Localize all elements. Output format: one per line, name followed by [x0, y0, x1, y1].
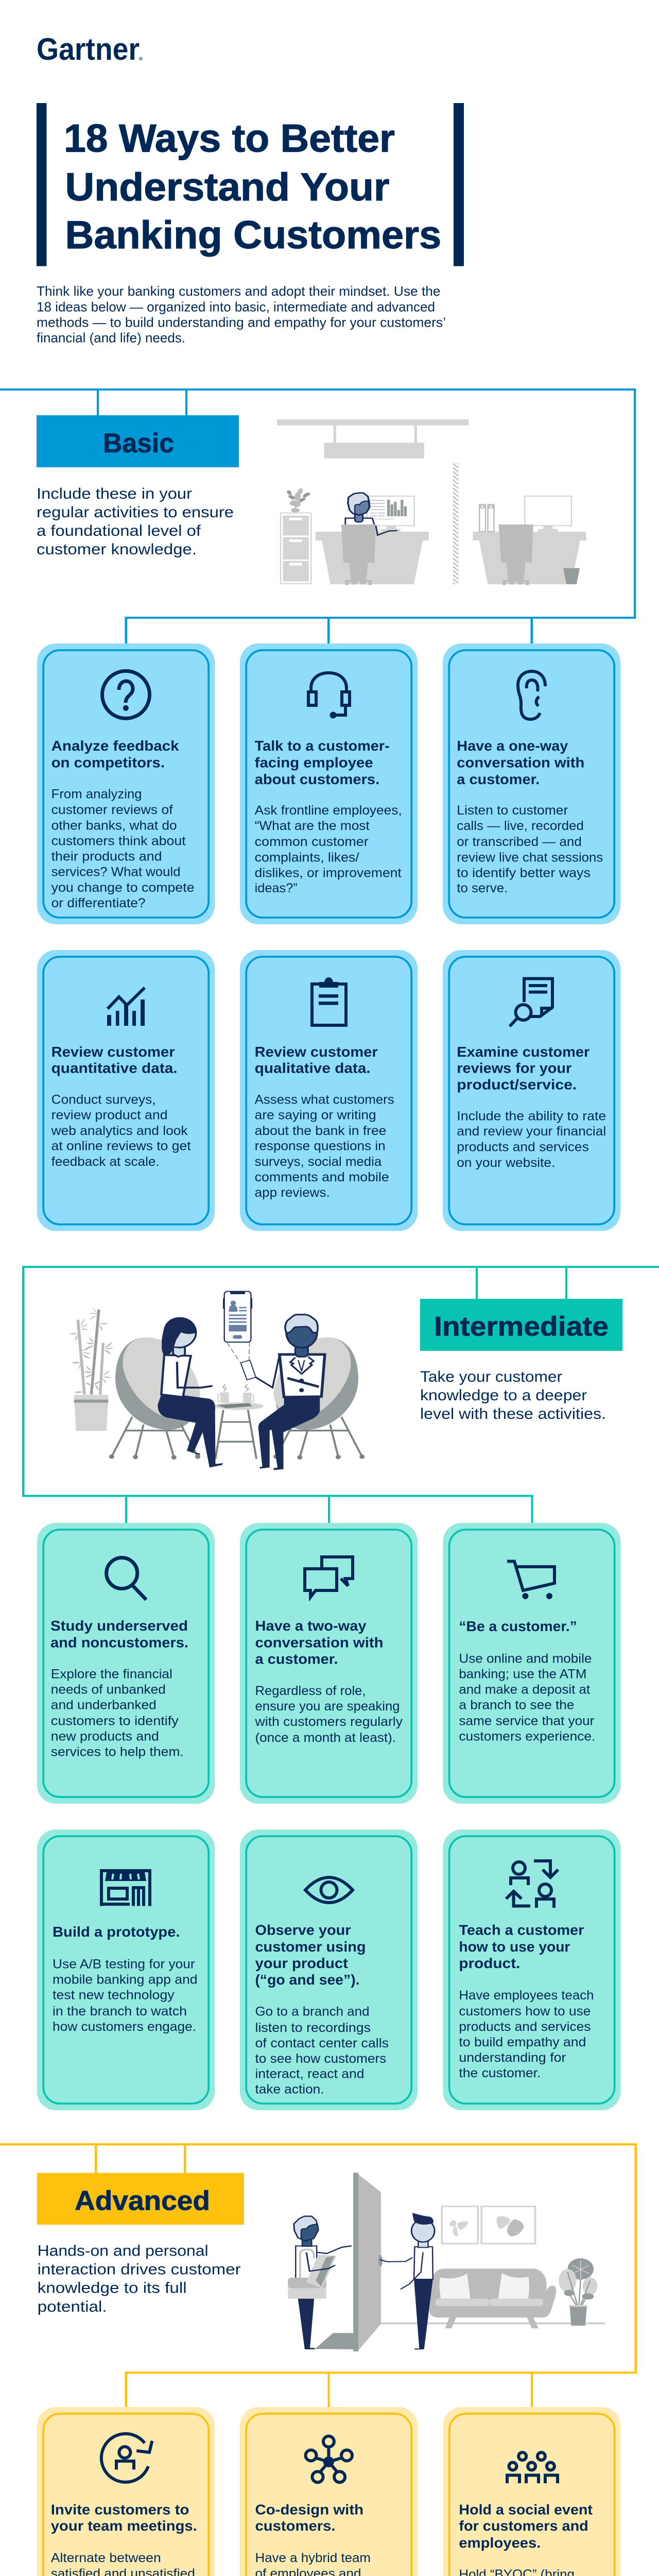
- panel: card quantitative data: [37, 950, 215, 1231]
- heading: on competitors.: [51, 754, 165, 771]
- text: Intermediate description: level with these activities.: [420, 1405, 606, 1422]
- text: Basic description: regular activities to ensure: [37, 504, 234, 521]
- body text: or transcribed — and: [457, 835, 582, 849]
- icon: clipboard: [312, 977, 346, 1025]
- intro paragraph: methods — to build understanding and empathy for your customers’: [37, 314, 446, 330]
- body text: surveys, social media: [255, 1155, 381, 1169]
- body text: Conduct surveys,: [51, 1093, 156, 1107]
- body text: services to help them.: [51, 1745, 184, 1759]
- heading: [255, 2502, 363, 2534]
- body text: at online reviews to get: [51, 1139, 191, 1154]
- heading: [255, 1618, 383, 1667]
- heading: customers.: [255, 2518, 336, 2534]
- logo: Gartner top: ®: [139, 56, 143, 61]
- heading: Review customer: [255, 1044, 378, 1060]
- body text: about the bank in free: [255, 1124, 386, 1138]
- heading: [457, 1044, 590, 1093]
- body text: ensure you are speaking: [255, 1699, 400, 1714]
- body text: mobile banking app and: [53, 1973, 198, 1987]
- body text: to build empathy and: [459, 2035, 586, 2049]
- body text: services? What would: [51, 865, 181, 879]
- icon: storefront: [101, 1871, 150, 1906]
- heading: and noncustomers.: [50, 1635, 188, 1651]
- heading: for customers and: [459, 2518, 588, 2534]
- heading: product.: [459, 1955, 520, 1971]
- body text: and underbanked: [51, 1698, 157, 1713]
- panel: card social event: [443, 2407, 620, 2576]
- icon: network: [306, 2436, 352, 2482]
- body text: test new technology: [53, 1988, 175, 2003]
- body text: products and services: [457, 1140, 589, 1154]
- heading: a customer.: [457, 771, 540, 787]
- heading: your product: [255, 1955, 348, 1971]
- body text: web analytics and look: [51, 1124, 188, 1138]
- heading: conversation with: [255, 1635, 383, 1651]
- heading: [255, 1922, 366, 1988]
- body text: [459, 1652, 595, 1744]
- body text: the customer.: [459, 2066, 541, 2080]
- intro paragraph: Think like your banking customers and adopt their mindset. Use the: [37, 283, 441, 299]
- text: Intermediate description: [420, 1368, 606, 1422]
- panel: card one-way conversation: [443, 643, 620, 924]
- body text: customers experience.: [459, 1730, 595, 1744]
- intro paragraph: [37, 283, 446, 345]
- text: Basic description: Include these in your: [37, 485, 192, 502]
- body text: [255, 1093, 394, 1200]
- panel: card examine reviews: [443, 950, 620, 1231]
- heading: Advanced label: Advanced: [75, 2185, 210, 2216]
- body text: [254, 1684, 403, 1745]
- heading: reviews for your: [457, 1060, 572, 1076]
- panel: card study underserved: [37, 1523, 215, 1804]
- heading: [50, 1618, 188, 1651]
- body text: new products and: [51, 1730, 159, 1744]
- body text: [255, 2004, 389, 2097]
- body text: [50, 2551, 195, 2576]
- body text: to serve.: [457, 881, 508, 895]
- illustration: door and living room: [288, 2173, 605, 2351]
- panel: card talk to employee: [240, 643, 418, 924]
- icon: cycle with person: [101, 2434, 152, 2482]
- body text: (once a month at least).: [255, 1731, 396, 1745]
- heading: [457, 738, 584, 787]
- heading: [51, 2502, 197, 2534]
- title block: Banking Customers: [65, 213, 441, 257]
- body text: how customers engage.: [53, 2020, 196, 2034]
- heading: how to use your: [459, 1939, 570, 1955]
- heading: employees.: [459, 2535, 541, 2551]
- body text: Include the ability to rate: [457, 1109, 606, 1123]
- body text: Have a hybrid team: [255, 2551, 371, 2565]
- icon: document with magnifier: [510, 979, 552, 1026]
- body text: needs of unbanked: [51, 1683, 166, 1697]
- body text: review live chat sessions: [457, 851, 603, 865]
- heading: [51, 738, 179, 771]
- heading: [255, 1044, 378, 1076]
- body text: a branch to see the: [459, 1698, 574, 1713]
- panel: card analyze feedback: [37, 643, 215, 924]
- icon: chat bubbles: [305, 1557, 353, 1597]
- heading: quantitative data.: [51, 1060, 178, 1076]
- body text: customers think about: [51, 834, 186, 849]
- text: Advanced description: interaction drives customer: [38, 2261, 241, 2278]
- heading: [459, 1922, 584, 1971]
- body text: app reviews.: [255, 1185, 330, 1200]
- body text: Explore the financial: [51, 1667, 172, 1682]
- body text: or differentiate?: [51, 896, 146, 910]
- body text: interact, react and: [255, 2067, 365, 2081]
- text: Intermediate description: knowledge to a deeper: [420, 1387, 587, 1404]
- heading: Intermediate label: [420, 1299, 622, 1351]
- panel: card build a prototype: [37, 1829, 215, 2110]
- body text: Assess what customers: [255, 1093, 394, 1107]
- heading: “Be a customer.”: [459, 1618, 577, 1634]
- panel: card two-way conversation: [240, 1523, 418, 1804]
- body text: and review your financial: [457, 1124, 606, 1139]
- body text: to identify better ways: [457, 866, 591, 880]
- body text: with customers regularly: [254, 1715, 403, 1729]
- body text: [51, 1667, 184, 1759]
- heading: about customers.: [255, 771, 379, 787]
- heading: your team meetings.: [51, 2518, 197, 2534]
- panel: card qualitative data: [240, 950, 418, 1231]
- body text: listen to recordings: [255, 2021, 371, 2035]
- body text: comments and mobile: [255, 1170, 389, 1184]
- heading: [459, 2502, 593, 2551]
- text: Advanced description: knowledge to its full: [38, 2280, 187, 2297]
- heading: Examine customer: [457, 1044, 590, 1060]
- heading: product/service.: [457, 1077, 577, 1093]
- heading: [255, 738, 390, 787]
- heading: Build a prototype.: [53, 1924, 180, 1940]
- heading: Review customer: [51, 1044, 175, 1060]
- icon: group of people: [507, 2452, 558, 2483]
- illustration: office desks: [277, 419, 586, 585]
- body text: you change to compete: [51, 880, 195, 895]
- heading: Talk to a customer-: [255, 738, 390, 754]
- body text: Ask frontline employees,: [255, 803, 402, 818]
- body text: [51, 1093, 191, 1169]
- icon: shopping cart: [507, 1561, 554, 1599]
- heading: Analyze feedback: [51, 738, 179, 754]
- text: Intermediate description: Take your customer: [420, 1368, 562, 1385]
- body text: customers to identify: [51, 1714, 179, 1728]
- body text: review product and: [51, 1108, 168, 1123]
- intro paragraph: 18 ideas below — organized into basic, intermediate and advanced: [37, 299, 435, 315]
- body text: [255, 803, 402, 895]
- heading: (“go and see”).: [255, 1972, 359, 1988]
- body text: are saying or writing: [255, 1108, 376, 1123]
- body text: take action.: [255, 2082, 324, 2097]
- body text: and make a deposit at: [459, 1683, 590, 1697]
- icon: chart: [107, 988, 145, 1026]
- body text: Go to a branch and: [255, 2004, 370, 2019]
- body text: response questions in: [255, 1139, 386, 1154]
- body text: in the branch to watch: [53, 2004, 187, 2019]
- body text: their products and: [51, 850, 162, 864]
- body text: Listen to customer: [457, 803, 568, 818]
- heading: customer using: [255, 1939, 366, 1955]
- panel: intermediate section frame: [22, 1266, 659, 1524]
- body text: products and services: [459, 2020, 591, 2034]
- illustration: two people sitting with phone: [70, 1292, 365, 1470]
- intro paragraph: financial (and life) needs.: [37, 330, 185, 345]
- body text: Use online and mobile: [459, 1652, 592, 1666]
- heading: qualitative data.: [255, 1060, 371, 1076]
- panel: card teach a customer: [443, 1829, 620, 2110]
- body text: banking; use the ATM: [459, 1667, 586, 1682]
- body text: on your website.: [457, 1156, 555, 1170]
- heading: Hold a social event: [459, 2502, 593, 2518]
- body text: to see how customers: [255, 2052, 386, 2066]
- body text: [457, 803, 603, 895]
- body text: dislikes, or improvement: [255, 866, 402, 880]
- body text: complaints, likes/: [255, 851, 359, 865]
- heading: Invite customers to: [51, 2502, 189, 2518]
- body text: Use A/B testing for your: [53, 1957, 195, 1972]
- text: Basic description: customer knowledge.: [37, 541, 197, 558]
- title block: 18 Ways to Better: [64, 117, 395, 161]
- body text: other banks, what do: [51, 819, 177, 833]
- panel: card co-design: [240, 2407, 418, 2576]
- body text: customers how to use: [459, 2004, 591, 2019]
- body text: of contact center calls: [255, 2036, 389, 2050]
- heading: facing employee: [255, 754, 373, 771]
- icon: ear: [518, 671, 545, 719]
- body text: [53, 1957, 198, 2034]
- text: Advanced description: [38, 2242, 241, 2315]
- icon: people exchange: [506, 1861, 558, 1908]
- body text: feedback at scale.: [51, 1155, 160, 1169]
- body text: Regardless of role,: [255, 1684, 366, 1698]
- heading: Intermediate label: Intermediate: [434, 1312, 609, 1342]
- icon: magnifying glass: [107, 1558, 146, 1600]
- body text: [51, 787, 195, 910]
- heading: Observe your: [255, 1922, 351, 1938]
- text: Advanced description: potential.: [38, 2298, 107, 2315]
- body text: common customer: [255, 835, 369, 849]
- text: Basic description: a foundational level of: [37, 522, 201, 539]
- heading: [51, 1044, 178, 1076]
- heading: Co-design with: [255, 2502, 363, 2518]
- title block: [37, 103, 464, 266]
- body text: same service that your: [459, 1714, 594, 1728]
- heading: Advanced label: [37, 2173, 244, 2225]
- panel: basic section frame: [0, 388, 636, 644]
- body text: Alternate between: [51, 2551, 161, 2565]
- body text: [459, 1988, 594, 2080]
- title block: Understand Your: [65, 165, 389, 209]
- body text: [457, 1109, 606, 1170]
- heading: Basic label: [37, 415, 239, 467]
- heading: Teach a customer: [459, 1922, 584, 1938]
- heading: Have a two-way: [255, 1618, 367, 1634]
- panel: card invite customers: [37, 2407, 215, 2576]
- body text: [255, 2551, 389, 2576]
- heading: a customer.: [255, 1651, 338, 1667]
- logo: Gartner top: Gartner: [37, 32, 140, 66]
- body text: From analyzing: [51, 787, 142, 802]
- panel: card observe your customer: [240, 1829, 418, 2110]
- body text: ideas?”: [255, 881, 298, 895]
- panel: card be a customer: [443, 1523, 620, 1804]
- panel: advanced section frame: [0, 2143, 637, 2408]
- text: Basic description: [37, 485, 234, 558]
- body text: understanding for: [459, 2050, 566, 2065]
- text: Advanced description: Hands-on and personal: [38, 2242, 209, 2259]
- icon: question mark: [102, 671, 149, 718]
- body text: customer reviews of: [51, 803, 173, 817]
- body text: “What are the most: [255, 819, 370, 833]
- heading: conversation with: [457, 754, 584, 771]
- icon: headset: [308, 673, 350, 718]
- heading: Have a one-way: [457, 738, 568, 754]
- body text: Have employees teach: [459, 1988, 594, 2003]
- icon: eye: [305, 1877, 353, 1903]
- heading: Basic label: Basic: [103, 428, 174, 459]
- heading: Study underserved: [50, 1618, 188, 1634]
- body text: calls — live, recorded: [457, 819, 584, 833]
